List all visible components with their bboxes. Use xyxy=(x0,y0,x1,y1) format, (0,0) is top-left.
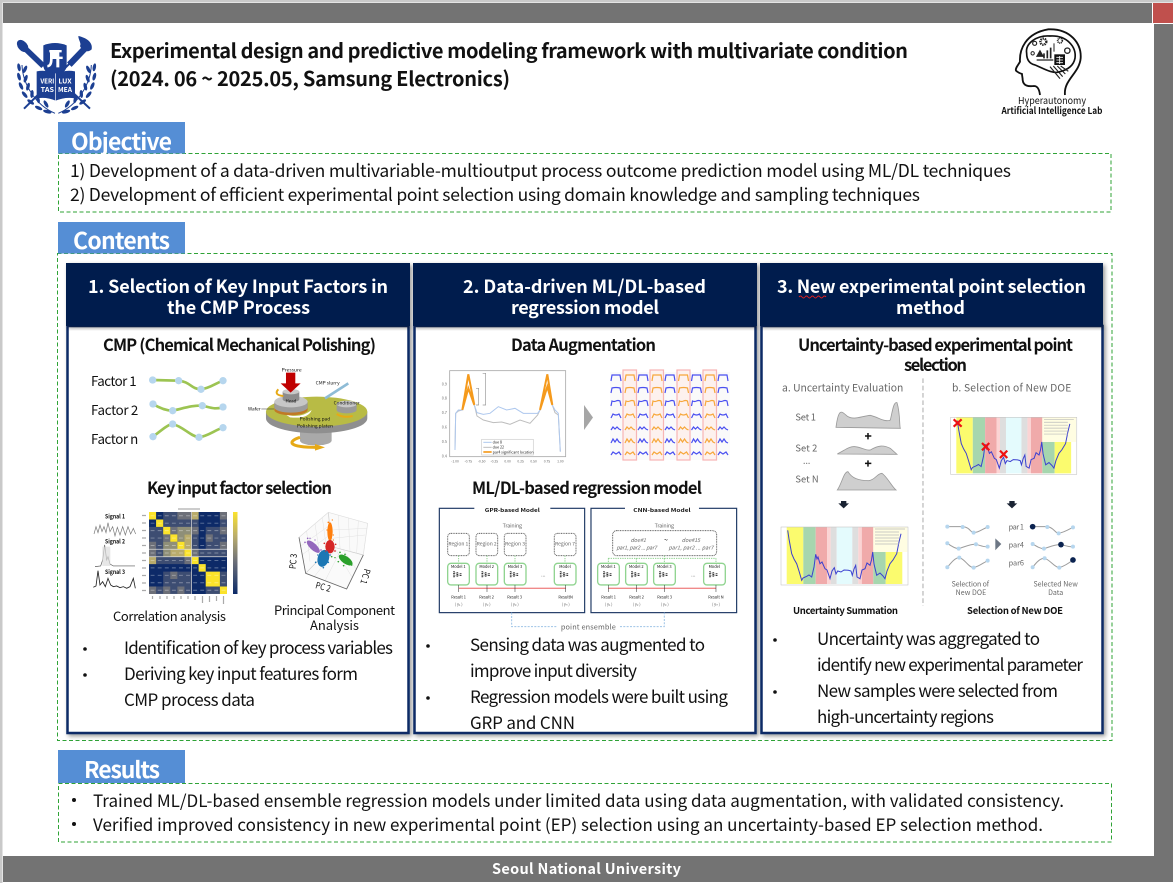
results tab xyxy=(58,750,185,783)
GPR model box: ( ŷ₁ ) xyxy=(455,601,463,607)
line chart: significant location: -1.00 xyxy=(451,459,459,464)
bullet list: panel 3: identify new experimental parameter xyxy=(817,651,1083,676)
label: uncertainty summation: Uncertainty Summation xyxy=(793,603,898,617)
panel 1 header: the CMP Process xyxy=(167,294,310,320)
signal plots: Signal 3 xyxy=(105,567,125,576)
CNN model box: ... xyxy=(691,571,696,579)
GPR model box: ( ŷ₃ ) xyxy=(511,601,519,607)
uncertainty evaluation column: a. Uncertainty Evaluation xyxy=(782,380,903,395)
point ensemble connector xyxy=(512,613,664,633)
CNN model box: Model 1 xyxy=(601,564,616,570)
CNN model box: Model 2 xyxy=(629,564,644,570)
CNN model box: ~ xyxy=(664,534,668,544)
results line 1: Trained ML/DL-based ensemble regression models under limited data using data augmentation, with validated consistency. xyxy=(93,787,1064,812)
icon: Hyperautonomy AI Lab brain logo xyxy=(1001,29,1102,117)
selection of new DOE column: Data xyxy=(1048,588,1063,598)
label: selection of new DOE: Selection of New DOE xyxy=(967,603,1063,617)
icon: Seoul National University emblem: LUX xyxy=(58,76,73,86)
panel 3 body xyxy=(762,326,1102,733)
selection of new DOE column: par4 xyxy=(1009,539,1024,550)
footer xyxy=(3,856,1173,882)
GPR model box: Model 1 xyxy=(451,564,466,570)
title: (2024. 06 ~ 2025.05, Samsung Electronics) xyxy=(110,63,510,92)
panel: results xyxy=(58,750,1112,842)
line chart: significant location: doe 8 xyxy=(493,441,502,446)
correlation heatmap xyxy=(142,509,238,604)
CNN model box: ( ŷ₃ ) xyxy=(661,601,669,607)
CNN model box: Result N xyxy=(708,595,724,601)
panel 2 header: 2. Data-driven ML/DL-based xyxy=(463,273,706,299)
label: principal component analysis: Analysis xyxy=(310,615,359,634)
uncertainty evaluation column: ... xyxy=(803,455,810,467)
heading: data augmentation: Data Augmentation xyxy=(511,332,656,356)
bullet list: panel 1: CMP process data xyxy=(124,686,255,711)
CNN model box: CNN-based Model xyxy=(633,506,691,514)
bullet list: panel 2 xyxy=(426,631,728,734)
line chart: significant location: par4 significant location xyxy=(493,451,534,456)
CMP machine illustration: Wafer xyxy=(248,406,261,412)
icon: Hyperautonomy AI Lab brain logo: Artificial Intelligence Lab xyxy=(1001,103,1102,117)
uncertainty evaluation column xyxy=(782,378,1017,606)
bullet list: panel 2: Regression models were built using xyxy=(470,683,728,708)
CNN model box: ( ŷₙ ) xyxy=(712,601,720,607)
GPR model box: ... xyxy=(541,571,546,579)
panel 2: regression model xyxy=(413,263,757,734)
PCA 3D scatter: PC 3 xyxy=(286,553,300,570)
line chart: significant location: doe 22 xyxy=(493,446,504,451)
CNN model box: doe#1 xyxy=(631,536,646,544)
line chart: significant location: 0.50 xyxy=(530,459,537,464)
uncertainty evaluation column: Set 1 xyxy=(795,410,816,424)
CMP machine illustration: Conditioner xyxy=(334,399,360,406)
signal plots: Signal 2 xyxy=(105,536,125,545)
panel 1 header: 1. Selection of Key Input Factors in xyxy=(88,273,388,299)
GPR model box: Region 7 xyxy=(555,541,575,548)
GPR model box: Result 3 xyxy=(507,595,522,601)
objective line 1: 1) Development of a data-driven multivariable-multioutput process outcome prediction model using ML/DL techniques xyxy=(70,158,1011,183)
title xyxy=(110,35,908,92)
CNN model box: par1, par2 ... par7 xyxy=(616,543,658,551)
section: contents frame xyxy=(58,222,1112,740)
label: principal component analysis xyxy=(274,600,395,634)
bullet list: panel 1: Deriving key input features form xyxy=(124,660,358,685)
objective text box xyxy=(58,154,1111,212)
contents tab xyxy=(58,222,185,254)
panel 1 body xyxy=(68,326,408,733)
panel 3 header xyxy=(760,263,1103,326)
selection of new DOE column: New DOE xyxy=(956,588,986,598)
line chart: significant location: 0.00 xyxy=(504,459,511,464)
line chart: significant location: 1.00 xyxy=(557,459,564,464)
icon: Seoul National University emblem xyxy=(15,36,97,114)
GPR model box: Result 1 xyxy=(451,595,466,601)
line chart: significant location: 0.5 xyxy=(442,440,447,445)
GPR model box: Model 3 xyxy=(508,564,522,570)
label: principal component analysis: Principal Component xyxy=(274,600,395,619)
bullet list: panel 1 xyxy=(83,634,393,711)
PCA 3D scatter: PC 1 xyxy=(357,567,374,586)
heading: key input factor selection: Key input factor selection xyxy=(147,475,332,499)
PCA 3D scatter: PC 2 xyxy=(314,578,332,595)
factor curves: Factor n xyxy=(91,429,138,448)
selection of new DOE column: b. Selection of New DOE xyxy=(952,380,1071,395)
contents heading: Contents xyxy=(73,222,170,256)
bullet list: panel 2: GRP and CNN xyxy=(470,709,575,734)
arrow xyxy=(584,405,593,430)
GPR model box: Result 2 xyxy=(479,595,494,601)
selection of new DOE column: Selected New xyxy=(1033,579,1078,589)
results line 2: Verified improved consistency in new experimental point (EP) selection using an uncertainty-based EP selection method. xyxy=(93,811,1043,836)
GPR model box: GPR-based Model xyxy=(485,506,540,514)
line chart: significant location: 0.75 xyxy=(544,459,550,464)
factor curves: Factor 2 xyxy=(91,400,138,419)
signal plots xyxy=(93,511,136,588)
GPR model box: ResultN xyxy=(558,595,573,601)
CNN model box: Result 1 xyxy=(601,595,616,601)
selection of new DOE column xyxy=(945,380,1078,598)
factor curves xyxy=(91,371,227,448)
icon: Seoul National University emblem: VERI xyxy=(39,76,54,86)
CNN model box: Training xyxy=(655,521,674,529)
panel 2 header xyxy=(413,263,757,326)
CMP machine illustration: CMP slurry xyxy=(316,380,340,386)
heading: CMP: CMP (Chemical Mechanical Polishing) xyxy=(103,332,376,356)
bullet list: panel 3: Uncertainty was aggregated to xyxy=(817,625,1040,650)
bullet list: panel 2: Sensing data was augmented to xyxy=(470,631,705,656)
uncertainty evaluation column: Set 2 xyxy=(795,441,817,455)
GPR model box: Region 1 xyxy=(448,541,469,548)
panel: objective xyxy=(58,122,1111,212)
CNN model box: Model 3 xyxy=(657,564,672,570)
panel 1: selection of key input factors xyxy=(66,263,410,733)
heading: uncertainty-based selection: selection xyxy=(904,352,967,376)
CNN model box: Result 2 xyxy=(629,595,644,601)
bullet list: panel 2: improve input diversity xyxy=(470,657,637,682)
line chart: significant location: 0.25 xyxy=(517,459,524,464)
CMP machine illustration: Pressure xyxy=(282,367,302,373)
GPR model box: Region 3 xyxy=(505,541,525,548)
chart: uncertainty summation xyxy=(781,527,908,585)
line chart: significant location: 0.8 xyxy=(442,397,447,402)
heading: regression model: ML/DL-based regression model xyxy=(472,475,702,499)
CNN model box: par1, par2 ... par7 xyxy=(668,543,715,551)
panel 3 header: method xyxy=(896,294,965,320)
label: correlation analysis: Correlation analysis xyxy=(113,606,226,625)
line chart: significant location: -0.25 xyxy=(491,459,498,464)
CNN model box: ( ŷ₁ ) xyxy=(605,601,613,607)
results heading: Results xyxy=(84,751,160,785)
CNN model box: ( ŷ₂ ) xyxy=(633,601,641,607)
GPR model box: Model xyxy=(559,564,571,570)
line chart: significant location: 0.7 xyxy=(442,411,447,416)
icon: Hyperautonomy AI Lab brain logo: Hyperautonomy xyxy=(1018,93,1086,107)
icon: Seoul National University emblem: MEA xyxy=(58,84,73,94)
panel 1 header xyxy=(66,263,410,326)
selection of new DOE column: Selection of xyxy=(952,579,990,589)
bullet list: panel 3 xyxy=(773,625,1083,728)
CMP machine illustration: Polishing platen xyxy=(297,422,333,429)
CMP machine illustration: Polishing pad xyxy=(300,416,331,423)
results text box xyxy=(58,784,1112,842)
CMP machine illustration xyxy=(248,367,367,451)
CMP machine illustration: Head xyxy=(285,398,297,405)
point ensemble connector: point ensemble xyxy=(561,622,616,633)
PCA 3D scatter xyxy=(286,512,374,595)
heading: uncertainty-based selection xyxy=(798,332,1073,376)
line chart: significant location: 0.6 xyxy=(442,426,447,431)
GPR model box: Model 2 xyxy=(479,564,494,570)
line chart: significant location: 0.9 xyxy=(442,382,447,387)
CNN model box: doe#15 xyxy=(682,536,701,544)
factor curves: Factor 1 xyxy=(91,371,137,390)
panel 3: new experimental point selection xyxy=(760,263,1103,733)
heading: uncertainty-based selection: Uncertainty-based experimental point xyxy=(798,332,1073,356)
selection of new DOE column: par6 xyxy=(1009,557,1024,568)
GPR model box: Region 2 xyxy=(477,541,497,548)
CNN model box: Model xyxy=(709,564,720,570)
title: Experimental design and predictive modeling framework with multivariate condition xyxy=(110,35,908,64)
bullet list: panel 3: New samples were selected from xyxy=(817,677,1058,702)
GPR model box: ( ŷₙ ) xyxy=(562,601,570,607)
objective tab xyxy=(58,122,185,154)
bullet list: panel 1: Identification of key process variables xyxy=(124,634,393,659)
panel 2 header: regression model xyxy=(511,294,659,320)
GPR model box xyxy=(439,506,585,613)
objective heading: Objective xyxy=(71,123,172,157)
uncertainty evaluation column: Set N xyxy=(795,471,819,485)
line chart: significant location: -0.75 xyxy=(465,459,472,464)
GPR model box: ( ŷ₂ ) xyxy=(483,601,491,607)
augmented data thumbnail grid xyxy=(610,370,730,460)
icon: Seoul National University emblem: TAS xyxy=(41,84,54,94)
objective line 2: 2) Development of efficient experimental point selection using domain knowledge and sampling techniques xyxy=(70,182,920,207)
CNN model box: Result 3 xyxy=(657,595,672,601)
footer: Seoul National University xyxy=(492,858,682,879)
line chart: significant location: 0.4 xyxy=(442,454,447,459)
panel 3 header: 3. New experimental point selection xyxy=(777,273,1086,299)
panel 2 body xyxy=(414,326,756,733)
bullet list: panel 3: high-uncertainty regions xyxy=(817,703,994,728)
GPR model box: Training xyxy=(503,521,522,529)
signal plots: Signal 1 xyxy=(105,511,125,520)
CNN model box xyxy=(591,506,737,613)
line chart: significant location xyxy=(442,371,566,464)
selection of new DOE column: par 1 xyxy=(1009,521,1024,532)
line chart: significant location: -0.50 xyxy=(478,459,486,464)
model diagram xyxy=(439,506,737,633)
